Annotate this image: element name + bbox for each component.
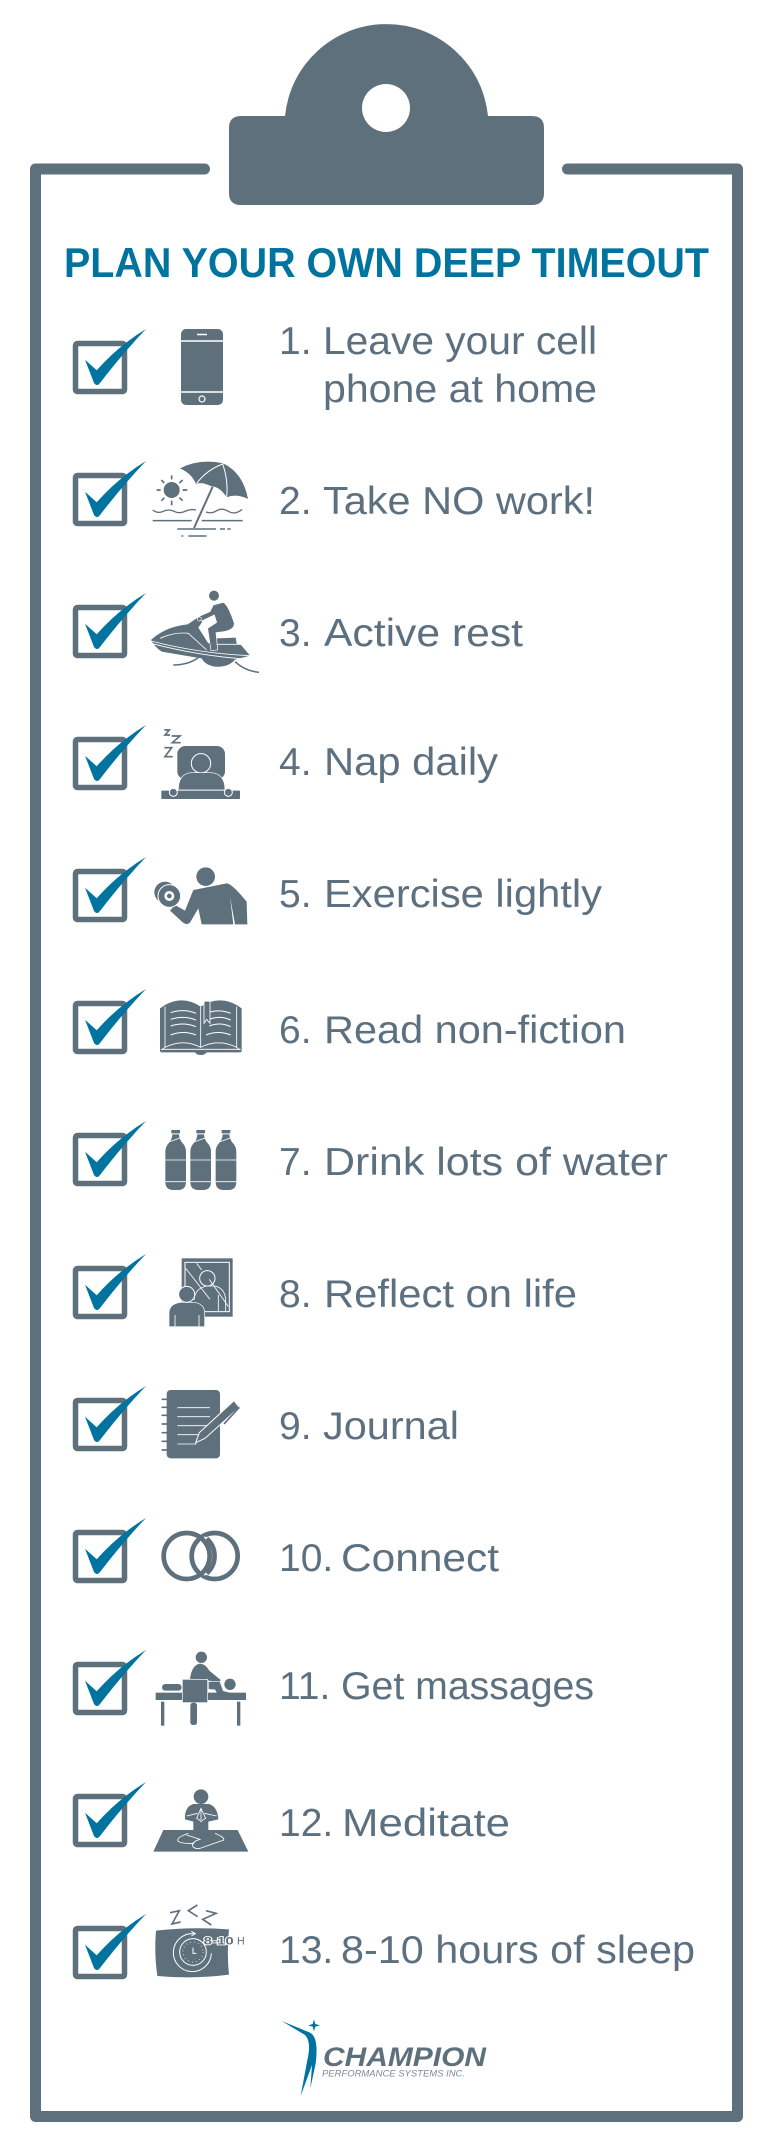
checkbox (76, 1121, 146, 1184)
item label: 8. (279, 1273, 312, 1316)
row 8 (76, 1254, 577, 1327)
icon: jet ski rider (151, 591, 259, 672)
checkbox (76, 857, 146, 920)
icon: beach umbrella and sun (153, 462, 248, 536)
item label: 3. (279, 612, 312, 655)
item label: 4. (279, 741, 312, 784)
item label: 12. (279, 1802, 333, 1845)
checkbox (76, 1782, 146, 1844)
row 6 (76, 989, 626, 1055)
icon: pillow with clock: 8-10 (204, 1935, 234, 1947)
item label: Drink lots of water (324, 1141, 668, 1184)
item label (279, 1537, 499, 1580)
row 4 (76, 725, 499, 799)
icon: pillow with clock: H (237, 1935, 245, 1947)
checkbox (76, 1914, 146, 1976)
item label (279, 320, 597, 411)
icon: water bottles (165, 1130, 236, 1190)
icon: phone (181, 329, 223, 405)
item label: 13. (279, 1929, 333, 1972)
item label: phone at home (323, 368, 597, 411)
icon: massage table (156, 1652, 246, 1726)
item label: 1. (279, 320, 312, 363)
row 13 (76, 1905, 695, 1977)
title: PLAN YOUR OWN DEEP TIMEOUT (64, 239, 709, 286)
icon: person lifting dumbbell (154, 867, 247, 924)
row 10 (76, 1518, 499, 1580)
logo figure (282, 2019, 320, 2096)
logo: Champion Performance Systems (282, 2019, 487, 2096)
item label: Reflect on life (324, 1273, 577, 1316)
item label: 6. (279, 1009, 312, 1052)
item label: Get massages (341, 1665, 594, 1708)
item label (279, 1802, 510, 1845)
icon: sleeping person (161, 730, 240, 799)
row 12 (76, 1782, 510, 1852)
checkbox (76, 1518, 146, 1580)
row 3 (76, 591, 523, 672)
icon: journal and pen (162, 1390, 239, 1458)
item label: Nap daily (324, 741, 499, 784)
checkbox (76, 989, 146, 1052)
icon: interlocking rings (164, 1533, 238, 1579)
clipboard clip (229, 24, 544, 205)
row 11 (76, 1650, 594, 1726)
item label: 11. (279, 1665, 330, 1708)
logo tagline: PERFORMANCE SYSTEMS INC. (322, 2068, 465, 2080)
row 7 (76, 1121, 668, 1190)
item label: 7. (279, 1141, 312, 1184)
icon: open book (160, 1000, 242, 1055)
item label: Take NO work! (323, 480, 595, 523)
item label: 5. (279, 873, 312, 916)
row 1 (76, 320, 597, 411)
checkbox (76, 725, 146, 788)
item label: Active rest (324, 612, 523, 655)
item label: 10. (279, 1537, 333, 1580)
row 2 (76, 461, 595, 536)
checkbox (76, 1386, 146, 1448)
checkbox (76, 1650, 146, 1712)
item label: 8-10 hours of sleep (341, 1929, 695, 1972)
item label: 9. (279, 1405, 312, 1448)
icon: pillow with clock (155, 1905, 245, 1977)
checkbox (76, 461, 146, 524)
item label: Journal (323, 1405, 459, 1448)
item label: Read non-fiction (324, 1009, 626, 1052)
item label: Leave your cell (323, 320, 597, 363)
checkbox (76, 593, 146, 656)
row 5 (76, 857, 603, 924)
row 9 (76, 1386, 459, 1458)
item label: Connect (341, 1537, 499, 1580)
logo name: CHAMPION (323, 2042, 487, 2072)
icon: meditating person (153, 1789, 248, 1852)
item label: Meditate (342, 1802, 510, 1845)
item label: Exercise lightly (324, 873, 603, 916)
checkbox (76, 329, 146, 392)
item label: 2. (279, 480, 312, 523)
checkbox (76, 1254, 146, 1316)
icon: person at mirror (169, 1258, 233, 1327)
